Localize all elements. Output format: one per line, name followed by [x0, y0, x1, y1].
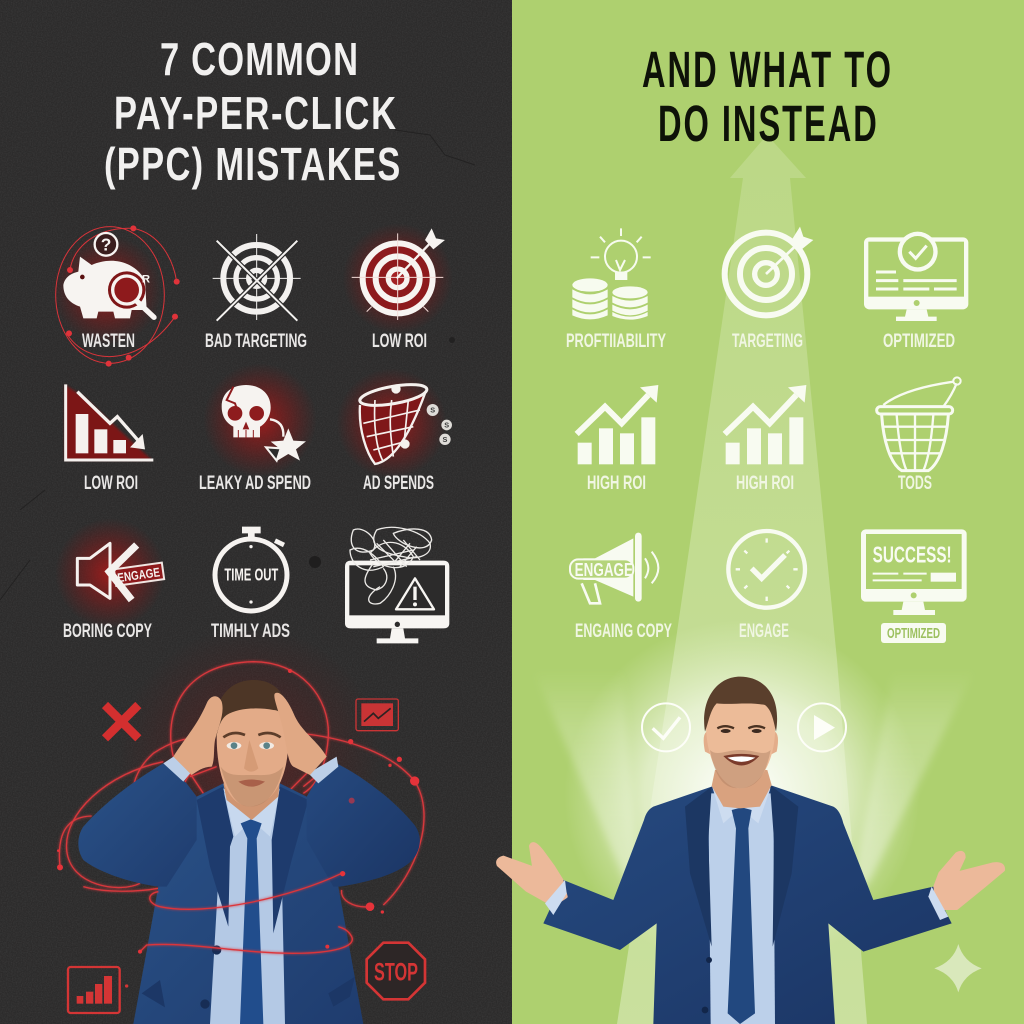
icon: low ROI target [343, 223, 453, 333]
icon: stop sign [367, 943, 425, 999]
icon: red X [105, 705, 138, 738]
hair [704, 677, 777, 732]
label: engage: ENGAGE [739, 621, 789, 642]
title: 7 common PPC mistakes: (PPC) MISTAKES [104, 138, 400, 190]
label: tods: TODS [898, 473, 932, 494]
title: and what to do instead: AND WHAT TO [642, 42, 891, 99]
title: 7 common PPC mistakes: 7 COMMON [160, 33, 358, 85]
torso [133, 783, 363, 1024]
icon: stopwatch time out [215, 527, 287, 611]
label: high ROI: HIGH ROI [587, 473, 646, 494]
rays behind man [533, 620, 975, 970]
label: targeting: TARGETING [732, 331, 803, 352]
icon: red bar chart box [68, 967, 128, 1013]
panel: mistakes (left, dark) [0, 0, 512, 1024]
label: leaky ad spend: LEAKY AD SPEND [199, 473, 311, 494]
title: 7 common PPC mistakes: PAY-PER-CLICK [114, 87, 396, 139]
illustration: stressed businessman with red orbits [57, 627, 425, 1024]
icon: success monitor [861, 529, 967, 615]
tie [728, 807, 755, 1024]
label: boring copy: BORING COPY [63, 621, 152, 642]
label: wasten: WASTEN [82, 331, 135, 352]
title: and what to do instead: DO INSTEAD [658, 96, 877, 153]
icon: stop sign: STOP [374, 960, 418, 987]
check circle [642, 703, 690, 751]
eyes, brows, nose, mouth [223, 733, 281, 787]
icon: optimized monitor [864, 232, 968, 321]
icon: megaphone engage: ENGAGE [575, 559, 633, 580]
neck [223, 780, 280, 820]
icon: leaky net with coins: S [443, 435, 448, 444]
face [217, 697, 288, 807]
icon: target with arrow [725, 227, 813, 315]
play circle [798, 703, 846, 751]
icon: falling chart [65, 384, 153, 460]
label: bad targeting: BAD TARGETING [205, 331, 307, 352]
icon: muted speaker with engage stamp: ENGAGE [117, 565, 161, 585]
eyes and smile [717, 726, 765, 765]
icon: leaky net with coins: S [444, 421, 449, 430]
hands [173, 696, 223, 775]
neck [712, 770, 772, 808]
title: 7 common PPC mistakes [104, 33, 400, 190]
right sleeve [307, 763, 420, 887]
icon: piggy bank with magnifier: ? [101, 235, 111, 255]
label: engaging copy: ENGAING COPY [575, 621, 672, 642]
label: ad spends: AD SPENDS [363, 473, 434, 494]
icon: success monitor: SUCCESS! [873, 542, 952, 568]
jacket and arms [543, 785, 952, 1024]
front orbits [140, 873, 352, 953]
label: optimized: OPTIMIZED [883, 331, 955, 352]
arrow beam [617, 135, 867, 1024]
ears [704, 732, 778, 755]
panel: what to do instead (right, green) [498, 0, 1024, 1024]
icon: red chart box [356, 699, 398, 731]
icon: clock with check [728, 531, 805, 608]
label: timely ads: TIMHLY ADS [211, 621, 290, 642]
label: profitability: PROFTIIABILITY [566, 331, 666, 352]
label: low ROI: LOW ROI [372, 331, 427, 352]
icon: rising chart 2 [725, 385, 806, 464]
face [706, 683, 775, 788]
icon: crossed out target [213, 234, 301, 321]
icon: muted speaker with engage stamp [55, 518, 165, 628]
icon: piggy bank with magnifier [52, 225, 180, 367]
sparkle [934, 944, 982, 992]
icon: rising chart [577, 385, 658, 464]
hair [215, 680, 288, 738]
badge: optimized [881, 623, 946, 643]
icon: clean net [877, 377, 961, 471]
icon: piggy bank with magnifier: R [142, 274, 150, 286]
icon: light bulb and coins [572, 228, 651, 320]
badge: optimized: OPTIMIZED [887, 625, 940, 642]
left sleeve [78, 763, 197, 887]
right hand [935, 853, 1003, 908]
icon: stopwatch time out: TIME OUT [224, 565, 279, 585]
lapels [685, 787, 712, 947]
label: low ROI 2: LOW ROI [84, 473, 138, 494]
icon: megaphone engage [570, 533, 658, 603]
icon: tangled monitor with warning [345, 527, 449, 643]
icon: skull and star [203, 363, 317, 477]
icon: leaky net with coins [337, 368, 452, 478]
title: and what to do instead [642, 42, 891, 153]
illustration: confident businessman [498, 677, 1003, 1024]
icon: leaky net with coins: S [430, 406, 435, 415]
shirt [708, 793, 775, 1024]
label: high ROI 2: HIGH ROI [736, 473, 794, 494]
left hand [498, 844, 566, 905]
